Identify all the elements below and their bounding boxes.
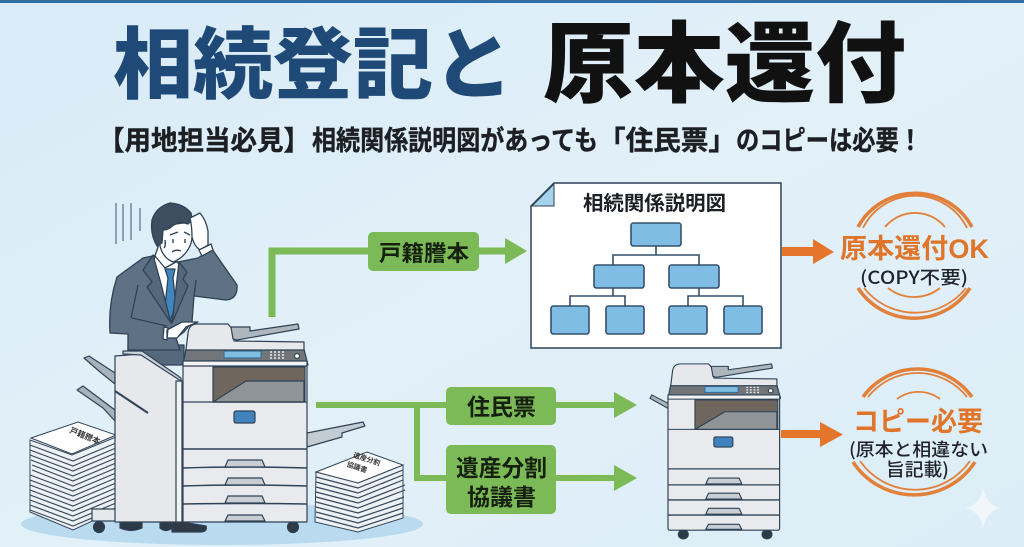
legs — [128, 345, 184, 365]
label: 住民票 — [446, 387, 556, 425]
title: 原本還付 — [543, 15, 906, 114]
arrow: copier to 戸籍謄本 and 相続関係説明図 — [272, 238, 527, 317]
icon: sparkle — [965, 488, 1001, 528]
body — [183, 362, 307, 522]
stamp: 原本還付OK: 原本還付OK — [840, 234, 990, 264]
stamp: 原本還付OK: (COPY不要) — [860, 264, 968, 290]
document heading: 相続関係説明図 — [583, 192, 726, 215]
icon: paper stack left: 戸籍謄本 — [68, 425, 102, 446]
control panel — [183, 349, 308, 365]
lapels — [143, 255, 188, 323]
panel: 相続関係説明図 document — [531, 183, 781, 348]
label: 遺産分割協議書: 遺産分割 — [456, 455, 547, 481]
scanner — [186, 324, 304, 350]
arrow: copier to 住民票 and 遺産分割協議書 — [316, 392, 637, 491]
icon: paper stack left — [30, 422, 116, 530]
label: 遺産分割協議書: 協議書 — [467, 484, 536, 510]
stamp: コピー必要: コピー必要 — [853, 407, 983, 437]
title: 相続登記と — [113, 21, 513, 109]
finisher trays — [77, 356, 115, 421]
tie — [165, 269, 176, 321]
cuff — [199, 244, 213, 256]
raised hand — [190, 213, 208, 250]
blue handle — [234, 411, 255, 423]
stamp: コピー必要: 旨記載) — [886, 456, 949, 482]
floor shadow — [21, 503, 423, 545]
label: 戸籍謄本 — [368, 232, 479, 271]
icon: paper stack right — [315, 450, 405, 532]
sweat lines — [116, 203, 140, 244]
shirt — [150, 256, 183, 322]
subtitle: 「住民票」 — [598, 126, 736, 156]
subtitle: のコピーは必要！ — [736, 126, 922, 156]
exit bay — [213, 367, 305, 402]
family tree chart — [551, 223, 762, 334]
subtitle — [98, 125, 922, 156]
icon: paper stack right: 遺産分割 — [352, 450, 381, 468]
subtitle: 【用地担当必見】 — [98, 126, 310, 156]
face — [160, 222, 192, 262]
arm lines — [131, 280, 196, 326]
right output tray — [307, 422, 365, 447]
arrow: copier to コピー必要 — [781, 422, 843, 447]
label: 戸籍謄本: 戸籍謄本 — [379, 241, 469, 266]
stamp: コピー必要 — [849, 369, 988, 495]
label: 住民票: 住民票 — [467, 394, 536, 420]
paper drawers — [183, 449, 307, 504]
copier right — [650, 364, 780, 539]
neck and collar — [155, 244, 176, 268]
suit body — [110, 249, 237, 350]
finisher — [115, 354, 181, 522]
finisher base — [92, 509, 116, 521]
figure: worried man — [110, 203, 237, 365]
facial features — [164, 232, 190, 252]
hair — [152, 203, 192, 246]
icon: paper stack right: 協議書 — [346, 460, 368, 475]
ADF tray — [231, 324, 299, 340]
label: 遺産分割協議書 — [446, 445, 556, 514]
stamp: 原本還付OK — [840, 193, 990, 318]
stamp: コピー必要: (原本と相違ない — [849, 436, 988, 462]
subtitle: 相続関係説明図があっても — [312, 125, 598, 156]
title — [113, 15, 906, 114]
copier main — [77, 324, 365, 532]
arrow: document to 原本還付OK — [782, 239, 834, 264]
lower cuff and hand — [163, 322, 198, 340]
